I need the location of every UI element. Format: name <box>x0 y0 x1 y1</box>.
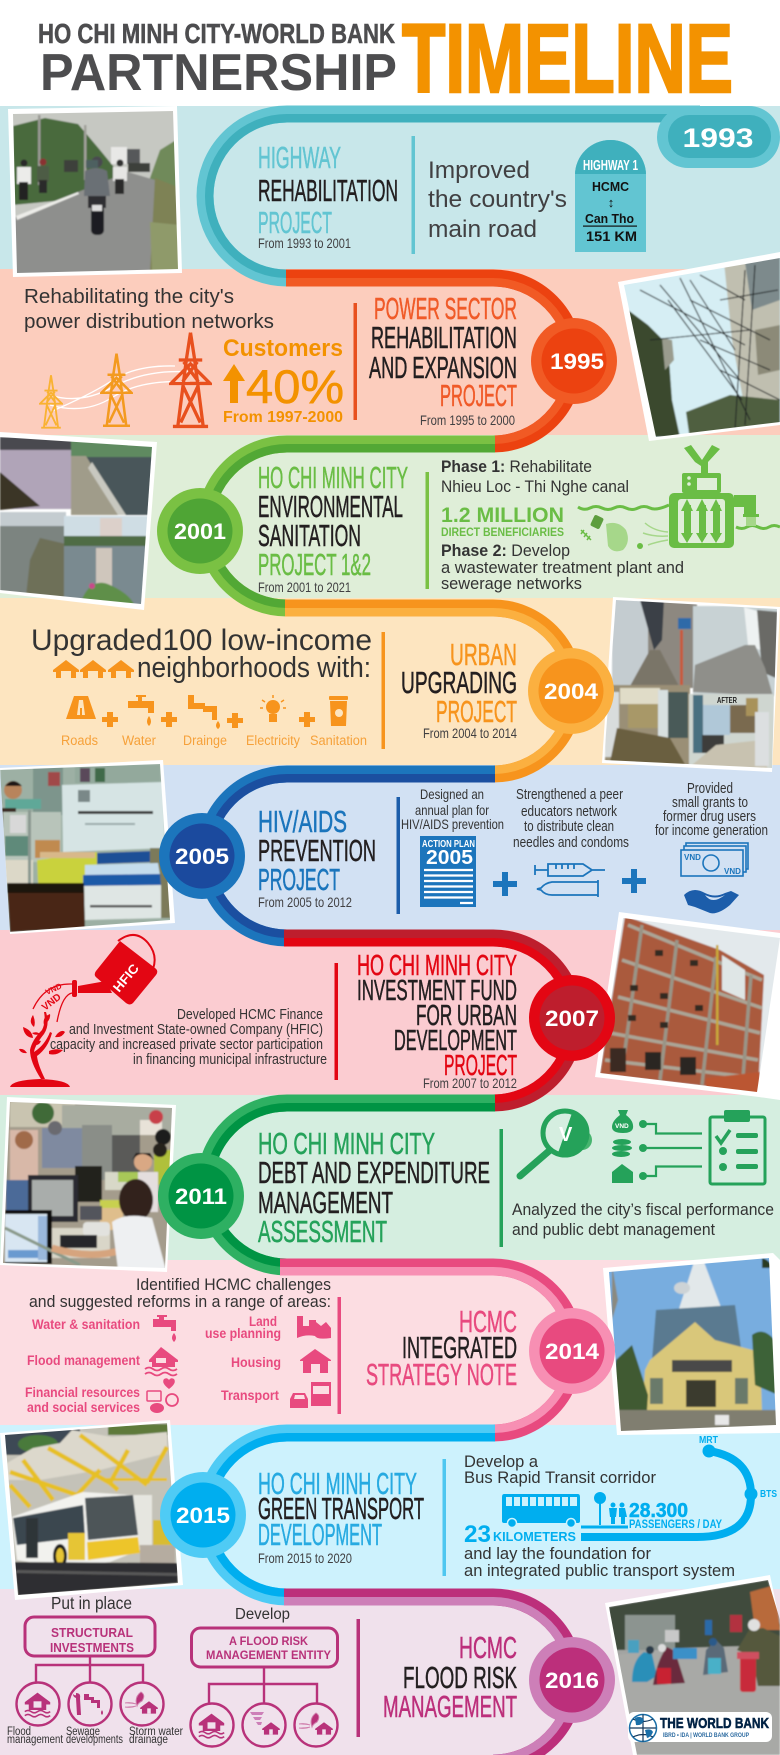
panel: 2007 investment fund <box>0 912 780 1103</box>
text: improved main road: main road <box>428 216 537 243</box>
divider <box>354 303 357 420</box>
photo: canal before and after <box>0 432 157 610</box>
labels: services: Water <box>122 733 156 748</box>
badge 2004 <box>528 648 614 734</box>
heading: From 2001 to 2021 <box>258 579 351 595</box>
text: fiscal performance: Analyzed the city’s fiscal performance <box>512 1201 774 1219</box>
heading: FLOOD RISK <box>403 1660 517 1695</box>
labels: services: Sanitation <box>310 733 367 748</box>
text: HFIC development <box>50 1006 327 1068</box>
text: phases: Phase 1: Rehabilitate <box>441 458 592 476</box>
panel: 2001 environmental sanitation <box>0 432 780 610</box>
badge 2016: 2016 <box>545 1668 599 1693</box>
list: reform areas: Water & sanitation <box>32 1316 140 1332</box>
photo: alley upgrades: AFTER <box>717 696 737 705</box>
text: challenges intro: Identified HCMC challenges <box>136 1275 331 1294</box>
panel: 2016 flood risk management <box>0 1575 780 1755</box>
icon: plus <box>622 869 646 893</box>
icon: money and hand <box>681 843 748 913</box>
badge 2011: 2011 <box>175 1184 227 1209</box>
text: rehabilitating networks: power distribution networks <box>24 310 274 333</box>
labels: services <box>61 733 367 748</box>
diagram: structural investments: Flood <box>7 1726 31 1738</box>
diagram: BRT corridor: BTS <box>760 1489 777 1500</box>
logo: The World Bank: IBRD • IDA | WORLD BANK GROUP <box>663 1732 750 1739</box>
icon: magnifier: V <box>559 1124 573 1146</box>
badge 1995: 1995 <box>550 349 604 374</box>
diagram: structural investments: INVESTMENTS <box>50 1640 134 1655</box>
heading: HCMC <box>459 1630 517 1665</box>
heading: PROJECT <box>444 1050 517 1082</box>
diagram: structural investments: developments <box>66 1734 123 1746</box>
icon: money and hand: VND <box>684 853 701 862</box>
text: challenges intro <box>29 1275 331 1311</box>
heading: PREVENTION <box>258 833 376 868</box>
heading <box>258 1466 424 1566</box>
heading: PROJECT 1&2 <box>258 547 371 582</box>
list: reform areas: use planning <box>205 1325 281 1341</box>
icon: money and hand: VND <box>724 867 741 876</box>
text: HFIC development: capacity and increased private sector participation <box>50 1036 323 1053</box>
heading: REHABILITATION <box>371 320 517 355</box>
icon: syringe and condom <box>535 864 605 897</box>
pipe 2016 <box>284 1597 575 1755</box>
text: annual plan: Designed an <box>420 786 484 802</box>
labels: services: Drainge <box>183 733 227 748</box>
heading <box>369 291 517 428</box>
icon: highway sign <box>575 140 646 252</box>
heading <box>401 637 517 741</box>
text: small grants: Provided <box>687 781 733 797</box>
stat: customers 40% <box>223 335 344 426</box>
heading: HO CHI MINH CITY <box>357 950 517 982</box>
pipe 2001 <box>205 444 495 608</box>
diagram: BRT corridor <box>464 1435 777 1548</box>
heading: From 1993 to 2001 <box>258 235 351 251</box>
icon: highway sign: Can Tho <box>585 211 634 226</box>
photo: pharmacy counter <box>0 760 175 934</box>
panel: 2015 green transport <box>0 1420 780 1600</box>
labels: services: Roads <box>61 733 98 748</box>
divider <box>338 1297 341 1414</box>
heading: STRATEGY NOTE <box>366 1357 517 1392</box>
heading: MANAGEMENT <box>258 1185 393 1220</box>
list: reform areas: Housing <box>231 1354 281 1370</box>
text: small grants: former drug users <box>663 809 756 825</box>
divider <box>382 632 385 749</box>
heading <box>366 1304 517 1392</box>
heading: MANAGEMENT <box>383 1689 517 1724</box>
divider <box>500 1129 503 1247</box>
list: reform areas: Flood management <box>27 1352 140 1368</box>
text: small grants <box>655 781 768 839</box>
heading: PROJECT <box>436 694 517 729</box>
text: phases: a wastewater treatment plant and <box>441 559 684 577</box>
stat: customers 40%: Customers <box>223 335 343 362</box>
icon: highway sign: 151 KM <box>586 228 637 244</box>
text: develop BRT: Develop a <box>464 1452 539 1471</box>
heading: UPGRADING <box>401 665 517 700</box>
text: peer educators: Strengthened a peer <box>516 787 623 803</box>
badge 2015: 2015 <box>176 1503 230 1528</box>
text: challenges intro: and suggested reforms in a range of areas: <box>29 1292 331 1311</box>
diagram: BRT corridor: 28.300 <box>629 1500 688 1522</box>
text: upgraded neighborhoods: neighborhoods with: <box>137 652 371 684</box>
heading: HO CHI MINH CITY <box>258 460 408 495</box>
text: develop BRT: Bus Rapid Transit corridor <box>464 1468 656 1487</box>
badge 1995 <box>531 318 617 404</box>
panel: 2004 urban upgrading <box>0 597 780 774</box>
diagram: structural investments <box>7 1593 183 1746</box>
text: rehabilitating networks <box>24 285 274 333</box>
heading: DEVELOPMENT <box>394 1025 517 1057</box>
diagram: structural investments: drainage <box>129 1734 168 1746</box>
text: rehabilitating networks: Rehabilitating the city's <box>24 285 234 308</box>
heading: ENVIRONMENTAL <box>258 489 403 524</box>
heading: SANITATION <box>258 518 361 553</box>
icon: watering can and plant: HFIC <box>110 960 142 995</box>
list: reform areas: and social services <box>27 1399 140 1415</box>
text: foundation <box>464 1544 735 1580</box>
heading: INTEGRATED <box>402 1330 517 1365</box>
diagram: BRT corridor: MRT <box>699 1435 718 1446</box>
heading: DEBT AND EXPENDITURE <box>258 1155 490 1190</box>
text: phases: 1.2 MILLION <box>441 504 564 527</box>
panel: 2005 HIV/AIDS prevention <box>0 760 780 938</box>
logo: The World Bank <box>628 1712 772 1742</box>
labels: services: Electricity <box>246 733 300 748</box>
icon: highway sign: HIGHWAY 1 <box>583 158 638 174</box>
text: peer educators: to distribute clean <box>524 819 614 835</box>
icon: watering can and plant <box>10 935 157 1087</box>
text: annual plan <box>401 786 504 832</box>
panel: 1995 power sector <box>0 250 780 445</box>
heading <box>258 140 398 251</box>
text: peer educators: educators network <box>521 804 618 820</box>
heading: HO CHI MINH CITY <box>258 1466 417 1501</box>
text: phases: DIRECT BENEFICIARIES <box>441 527 564 539</box>
heading <box>258 460 408 595</box>
heading: PROJECT <box>440 378 517 413</box>
text: phases <box>441 458 684 593</box>
title: PARTNERSHIP <box>40 44 397 102</box>
photo: motorbikes on highway <box>8 106 183 277</box>
text: fiscal performance: and public debt management <box>512 1221 715 1239</box>
heading: HCMC <box>459 1304 517 1339</box>
diagram: flood risk management entity <box>190 1606 338 1746</box>
badge 2014 <box>529 1308 615 1394</box>
list: reform areas: Financial resources <box>25 1384 140 1400</box>
icon: money to checklist: VND <box>615 1123 629 1130</box>
badge 2014: 2014 <box>545 1339 600 1364</box>
diagram: structural investments: STRUCTURAL <box>51 1625 133 1640</box>
photo: brick building <box>595 912 780 1100</box>
icon: highway sign: HCMC <box>592 179 630 194</box>
photo: tower and colonial hall <box>603 1253 780 1435</box>
diagram: structural investments: Storm water <box>129 1726 183 1738</box>
heading: URBAN <box>450 637 517 672</box>
badge 2004: 2004 <box>544 679 599 704</box>
stat: customers 40%: 40% <box>246 360 344 413</box>
photo: alley upgrades <box>602 597 780 772</box>
pipe 2005 <box>205 774 495 938</box>
heading: REHABILITATION <box>258 173 398 208</box>
text: improved main road <box>428 157 567 243</box>
text: HFIC development: in financing municipal infrastructure <box>133 1051 327 1068</box>
icons: services row <box>66 695 348 729</box>
icon: watering can and plant: VND <box>44 981 63 997</box>
heading: POWER SECTOR <box>374 291 517 326</box>
badge 2011 <box>158 1153 244 1239</box>
photo: BRT bus station <box>0 1420 185 1600</box>
divider <box>442 1459 446 1576</box>
heading: From 2015 to 2020 <box>258 1550 352 1566</box>
heading: AND EXPANSION <box>369 350 517 385</box>
heading <box>383 1630 517 1724</box>
text: peer educators <box>513 787 629 851</box>
text: annual plan: annual plan for <box>415 802 489 818</box>
heading: PROJECT <box>258 862 340 897</box>
heading: INVESTMENT FUND <box>357 975 517 1007</box>
heading: From 2005 to 2012 <box>258 894 352 910</box>
divider <box>412 136 415 254</box>
badge 2005 <box>159 813 245 899</box>
text: improved main road: Improved <box>428 157 530 184</box>
badge 2015 <box>160 1472 246 1558</box>
heading: HIV/AIDS <box>258 804 347 839</box>
divider <box>356 1619 360 1737</box>
diagram: structural investments: management <box>7 1734 64 1746</box>
icon: treatment machine <box>578 445 780 551</box>
text: phases: Phase 2: Develop <box>441 542 570 560</box>
text: foundation: and lay the foundation for <box>464 1544 651 1563</box>
photo: bank office <box>0 1097 176 1272</box>
list: reform areas: Transport <box>221 1387 279 1403</box>
text: phases: Nhieu Loc - Thi Nghe canal <box>441 478 629 496</box>
heading: FOR URBAN <box>416 1000 517 1032</box>
list: reform areas: Land <box>249 1313 277 1329</box>
text: fiscal performance <box>512 1201 774 1239</box>
pipe 2011 <box>205 1103 495 1267</box>
text: develop BRT <box>464 1452 656 1487</box>
icon: action plan document <box>420 836 476 907</box>
divider <box>334 963 338 1080</box>
diagram: BRT corridor: PASSENGERS / DAY <box>629 1519 722 1531</box>
photo: tangled power lines <box>618 250 780 445</box>
pipe 1995 <box>286 278 575 444</box>
text: HFIC development: and Investment State-owned Company (HFIC) <box>69 1021 323 1038</box>
title <box>38 4 733 113</box>
heading <box>258 1126 490 1249</box>
heading: From 2004 to 2014 <box>423 725 517 741</box>
icon: action plan document: 2005 <box>426 847 473 869</box>
badge 2016 <box>529 1637 615 1723</box>
text: upgraded neighborhoods <box>31 624 372 684</box>
heading <box>357 950 517 1091</box>
badge 2005: 2005 <box>175 844 229 869</box>
heading: From 1995 to 2000 <box>420 412 515 428</box>
divider <box>426 472 429 589</box>
icon: highway sign: ↕ <box>608 195 614 210</box>
text: annual plan: HIV/AIDS prevention <box>401 816 504 832</box>
diagram: BRT corridor: KILOMETERS <box>493 1529 576 1544</box>
diagram: flood risk management entity: A FLOOD RISK <box>229 1636 309 1648</box>
text: phases: sewerage networks <box>441 575 582 593</box>
pipe 2015 <box>205 1433 495 1597</box>
photo: flooded street <box>604 1575 780 1755</box>
title: HO CHI MINH CITY-WORLD BANK <box>38 18 395 49</box>
pipe 1993 <box>205 114 700 278</box>
heading: From 2007 to 2012 <box>423 1075 517 1091</box>
text: upgraded neighborhoods: Upgraded100 low-income <box>31 624 372 657</box>
panel: 1993 highway rehabilitation <box>0 106 780 278</box>
diagram: flood risk management entity: Develop <box>235 1606 290 1623</box>
badge 2007: 2007 <box>545 1006 599 1031</box>
text: small grants: small grants to <box>672 795 748 811</box>
text: peer educators: needles and condoms <box>513 835 629 851</box>
heading: DEVELOPMENT <box>258 1517 382 1552</box>
list: reform areas <box>25 1313 331 1415</box>
heading: HO CHI MINH CITY <box>258 1126 435 1161</box>
text: improved main road: the country's <box>428 186 567 213</box>
pipe 2014 <box>280 1267 575 1433</box>
icon: money to checklist <box>612 1110 765 1184</box>
diagram: structural investments: Sewage <box>66 1726 100 1738</box>
icon: plus <box>493 872 517 896</box>
heading: PROJECT <box>258 205 332 240</box>
heading <box>258 804 376 910</box>
diagram: structural investments: Put in place <box>51 1593 132 1613</box>
icon: three houses <box>53 660 134 678</box>
icon: magnifier <box>520 1111 592 1176</box>
pipe 2007 <box>284 938 575 1103</box>
panel: 2011 debt and expenditure <box>0 1095 780 1272</box>
diagram: BRT corridor: 23 <box>464 1521 491 1548</box>
stat: customers 40%: From 1997-2000 <box>223 409 343 426</box>
badge 2001: 2001 <box>174 519 226 544</box>
heading: HIGHWAY <box>258 140 341 175</box>
badge 1993: 1993 <box>682 123 754 153</box>
icon: pylons <box>40 333 210 428</box>
diagram: flood risk management entity: MANAGEMENT ENTITY <box>206 1650 331 1662</box>
panel: 2014 integrated strategy note <box>0 1253 780 1435</box>
pipe 2004 <box>285 608 575 774</box>
icon: action plan document: ACTION PLAN <box>422 838 475 850</box>
icon: watering can and plant: VND <box>40 992 63 1013</box>
text: foundation: an integrated public transport system <box>464 1561 735 1580</box>
badge 2001 <box>157 488 243 574</box>
badge 1993 <box>657 106 780 168</box>
divider <box>396 797 400 914</box>
text: HFIC development: Developed HCMC Finance <box>177 1006 323 1023</box>
badge 2007 <box>529 975 615 1061</box>
heading: GREEN TRANSPORT <box>258 1491 424 1526</box>
heading: ASSESSMENT <box>258 1214 387 1249</box>
